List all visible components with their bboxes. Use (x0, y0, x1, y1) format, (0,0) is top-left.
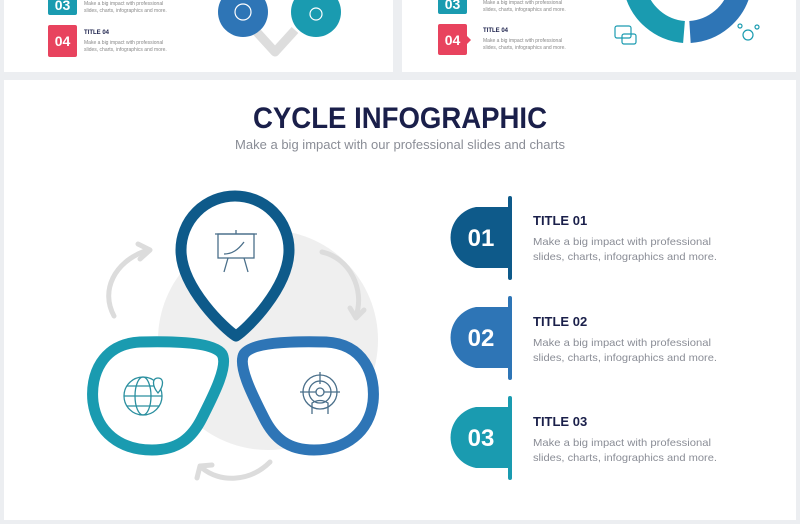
item 03: 03 (468, 425, 494, 452)
drop: bottom right (blue) (242, 342, 373, 450)
donut chart partial (635, 0, 740, 32)
badge 04 right (438, 24, 471, 55)
badge 04: 04 (55, 33, 70, 49)
item 01: TITLE 01 (533, 213, 587, 228)
icons small (615, 24, 759, 44)
item 02: TITLE 02 (533, 314, 587, 329)
item 03: TITLE 03 (533, 414, 587, 429)
text 04 right: slides, charts, infographics and more. (483, 45, 566, 51)
item 02: slides, charts, infographics and more. (533, 352, 717, 364)
panel: top left cropped slide (4, 0, 393, 72)
item 02 (451, 296, 717, 380)
badge 03 (48, 0, 77, 15)
text 04 right (483, 28, 566, 51)
drop: bottom left (teal) (93, 342, 224, 450)
icon: presentation board (215, 230, 257, 272)
V connector (255, 30, 295, 52)
item 01: slides, charts, infographics and more. (533, 251, 717, 263)
text 04: TITLE 04 (84, 30, 110, 36)
text 04: slides, charts, infographics and more. (84, 47, 167, 53)
item 03: Make a big impact with professional (533, 437, 711, 449)
item 01: Make a big impact with professional (533, 236, 711, 248)
text 03 right: slides, charts, infographics and more. (483, 7, 566, 13)
subtitle: Make a big impact with our professional slides and charts (235, 138, 565, 152)
text 04 right: TITLE 04 (483, 28, 509, 34)
item 03: slides, charts, infographics and more. (533, 452, 717, 464)
text 03: slides, charts, infographics and more. (84, 8, 167, 14)
badge 03 right (438, 0, 467, 14)
item 02: 02 (468, 325, 494, 352)
drop: top (dark blue) (181, 196, 289, 336)
text 04 (84, 30, 167, 53)
arrow bottom (197, 462, 270, 478)
badge 04 right: 04 (445, 32, 460, 48)
arrow right (322, 252, 364, 318)
badge 04 (48, 25, 77, 57)
grey center circle (158, 230, 378, 450)
arrow left (109, 244, 150, 316)
item 01 (451, 196, 717, 280)
panel: top right cropped slide (402, 0, 796, 72)
text 03 (84, 1, 167, 14)
icon: target person (300, 372, 340, 414)
item 02: Make a big impact with professional (533, 337, 711, 349)
item 01: 01 (468, 225, 494, 252)
text 03: Make a big impact with professional (84, 1, 163, 7)
icon: globe with pin (124, 377, 162, 415)
text 04 right: Make a big impact with professional (483, 38, 562, 44)
title: CYCLE INFOGRAPHIC (253, 102, 547, 135)
icon circles (218, 0, 341, 37)
item 03 (451, 396, 717, 480)
text 03 right (483, 0, 566, 13)
text 03 right: Make a big impact with professional (483, 0, 562, 6)
text 04: Make a big impact with professional (84, 40, 163, 46)
